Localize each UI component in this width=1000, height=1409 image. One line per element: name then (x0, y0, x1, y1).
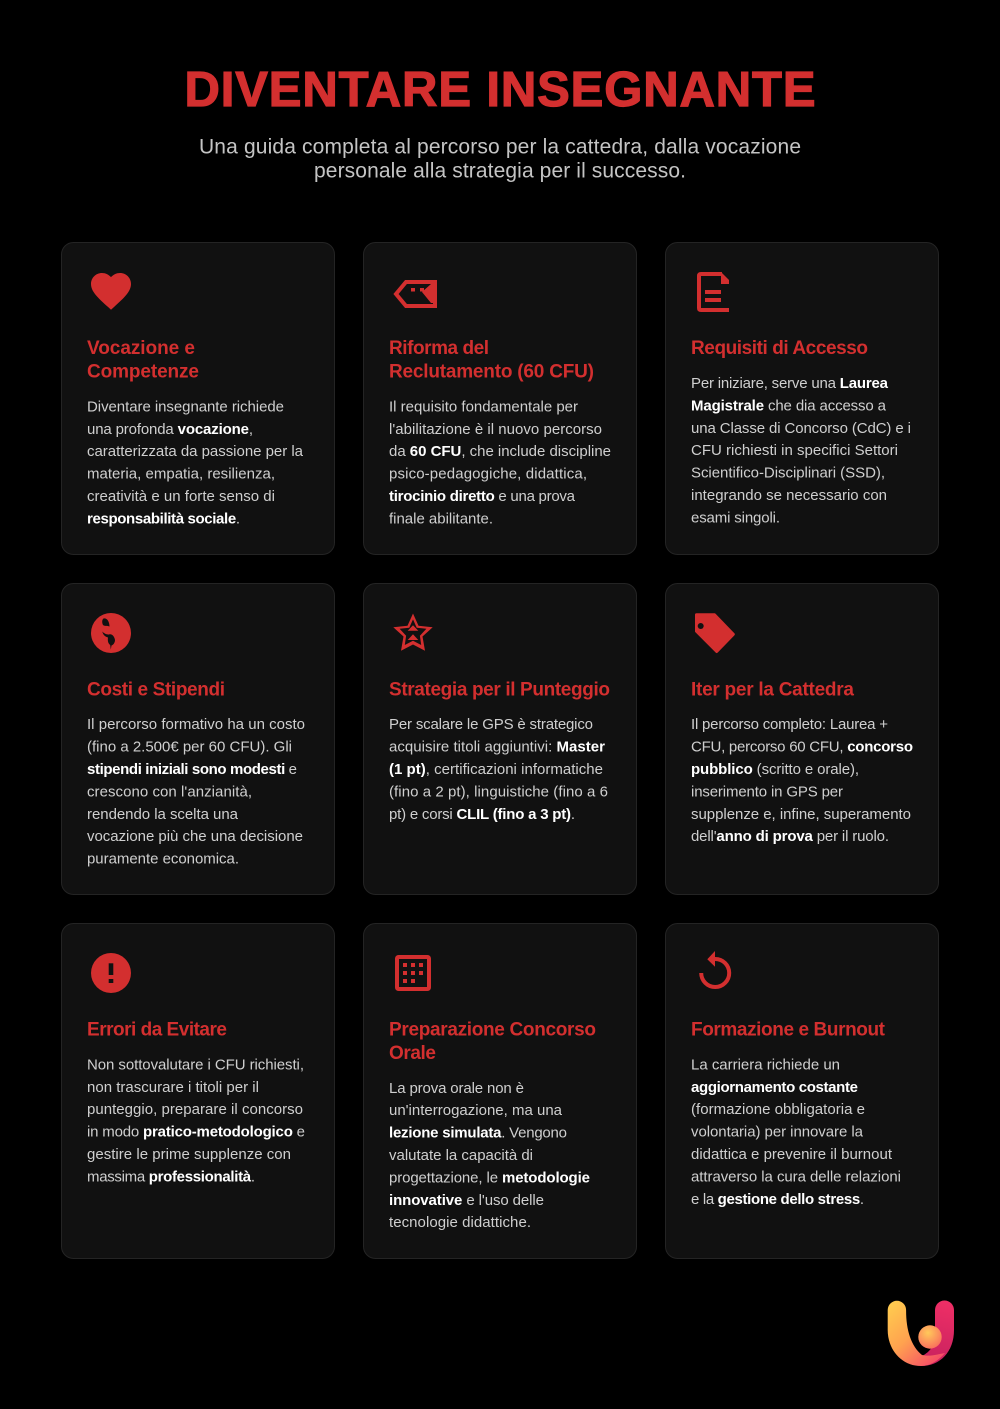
subtitle (199, 135, 801, 182)
body text: Diventare insegnante richiede (87, 398, 284, 415)
icon: grid (397, 957, 429, 989)
body text: aggiornamento costante (691, 1079, 858, 1096)
icon: document (699, 272, 729, 310)
panel: Costi e Stipendi (62, 584, 334, 894)
heading: Orale (389, 1043, 436, 1064)
body text (691, 716, 913, 845)
body text: punteggio, preparare il concorso (87, 1101, 303, 1118)
body text: Per scalare le GPS è strategico (389, 716, 593, 733)
body text: (1 pt), certificazioni informatiche (389, 761, 603, 778)
panel: Errori da Evitare (62, 924, 334, 1258)
title: DIVENTARE INSEGNANTE (184, 63, 816, 117)
logo (888, 1301, 954, 1366)
body text: Per iniziare, serve una Laurea (691, 375, 889, 392)
body text: (fino a 2.500€ per 60 CFU). Gli (87, 739, 292, 756)
body text: (formazione obbligatoria e (691, 1101, 865, 1118)
body text: puramente economica. (87, 851, 239, 868)
body text: crescono con l'anzianità, (87, 783, 252, 800)
body text (691, 375, 911, 526)
panel: Formazione e Burnout (666, 924, 938, 1258)
body text: supplenze e, infine, superamento (691, 806, 911, 823)
panel: Preparazione Concorso Orale (364, 924, 636, 1258)
body text: volontaria) per innovare la (691, 1124, 864, 1141)
heading: Costi e Stipendi (87, 679, 225, 700)
body text: La carriera richiede un (691, 1056, 840, 1073)
heading: Strategia per il Punteggio (389, 679, 610, 700)
body text: pubblico (scritto e orale), (691, 761, 859, 778)
body text: una profonda vocazione, (87, 421, 253, 438)
body text: (fino a 2 pt), linguistiche (fino a 6 (389, 783, 608, 800)
body text: Magistrale che dia accesso a (691, 397, 887, 414)
panel: Riforma del Reclutamento (364, 242, 636, 554)
body text: una Classe di Concorso (CdC) e i (691, 420, 911, 437)
body text: valutate la capacità di (389, 1147, 533, 1164)
heading (389, 1020, 596, 1064)
panel: Vocazione e Competenze (62, 242, 334, 554)
subtitle: personale alla strategia per il successo. (314, 159, 686, 182)
icon: warning (91, 953, 131, 993)
heading: Competenze (87, 362, 199, 382)
panel: Strategia per il Punteggio (364, 584, 636, 894)
body text: Il percorso completo: Laurea + (691, 716, 888, 733)
body text (389, 1080, 590, 1231)
body text: tirocinio diretto e una prova (389, 488, 576, 505)
body text (87, 716, 305, 868)
body text: lezione simulata. Vengono (389, 1125, 567, 1142)
heading (389, 338, 594, 382)
icon: refresh arrow (701, 951, 729, 987)
body text: innovative e l'uso delle (389, 1192, 544, 1209)
body text: non trascurare i titoli per il (87, 1079, 259, 1096)
body text: progettazione, le metodologie (389, 1169, 590, 1186)
body text (389, 398, 611, 527)
body text: gestire le prime supplenze con (87, 1146, 291, 1163)
heading: Iter per la Cattedra (691, 679, 854, 700)
body text: rendendo la scelta una (87, 806, 239, 823)
panel: Iter per la Cattedra (666, 584, 938, 894)
body text: CFU, percorso 60 CFU, concorso (691, 739, 913, 756)
body text: materia, empatia, resilienza, (87, 466, 275, 483)
body text (87, 1056, 305, 1185)
heading (87, 338, 199, 382)
body text: creatività e un forte senso di (87, 488, 275, 505)
body text: stipendi iniziali sono modesti e (87, 761, 297, 778)
icon: heart (91, 273, 131, 310)
panel: Requisiti di Accesso (666, 242, 938, 554)
body text: CFU richiesti in specifici Settori (691, 442, 898, 459)
body text: Scientifico-Disciplinari (SSD), (691, 465, 885, 482)
body text: Il requisito fondamentale per (389, 398, 578, 415)
heading: Reclutamento (60 CFU) (389, 362, 594, 382)
heading: Preparazione Concorso (389, 1020, 596, 1040)
body text: caratterizzata da passione per la (87, 443, 304, 460)
body text: esami singoli. (691, 509, 780, 526)
body text: massima professionalità. (87, 1168, 255, 1185)
body text: La prova orale non è (389, 1080, 524, 1097)
body text: l'abilitazione è il nuovo percorso (389, 421, 602, 438)
body text (87, 398, 304, 527)
body text: integrando se necessario con (691, 487, 887, 504)
subtitle: Una guida completa al percorso per la cattedra, dalla vocazione (199, 135, 801, 158)
heading: Requisiti di Accesso (691, 338, 868, 359)
body text: un'interrogazione, ma una (389, 1102, 563, 1119)
heading: Riforma del (389, 338, 489, 359)
icon: star (393, 614, 433, 651)
heading: Formazione e Burnout (691, 1020, 886, 1040)
body text: psico-pedagogiche, didattica, (389, 466, 587, 483)
icon: money coin (91, 613, 131, 653)
body text: inserimento in GPS per (691, 783, 843, 800)
body text: attraverso la cura delle relazioni (691, 1168, 901, 1185)
body text: didattica e prevenire il burnout (691, 1146, 893, 1163)
body text: tecnologie didattiche. (389, 1214, 531, 1231)
body text: dell'anno di prova per il ruolo. (691, 828, 889, 845)
body text: acquisire titoli aggiuntivi: Master (389, 739, 605, 756)
body text (389, 716, 608, 823)
body text: vocazione più che una decisione (87, 828, 303, 845)
body text: in modo pratico-metodologico e (87, 1124, 305, 1141)
body text: responsabilità sociale. (87, 510, 240, 527)
heading: Errori da Evitare (87, 1020, 227, 1040)
icon: ticket tag (396, 282, 437, 306)
body text (691, 1056, 901, 1208)
body text: Non sottovalutare i CFU richiesti, (87, 1056, 304, 1073)
body text: Il percorso formativo ha un costo (87, 716, 305, 733)
heading: Vocazione e (87, 338, 195, 359)
body text: e la gestione dello stress. (691, 1191, 864, 1208)
icon: price tag (696, 615, 733, 652)
body text: pt) e corsi CLIL (fino a 3 pt). (389, 806, 575, 823)
body text: finale abilitante. (389, 510, 493, 527)
body text: da 60 CFU, che include discipline (389, 443, 611, 460)
